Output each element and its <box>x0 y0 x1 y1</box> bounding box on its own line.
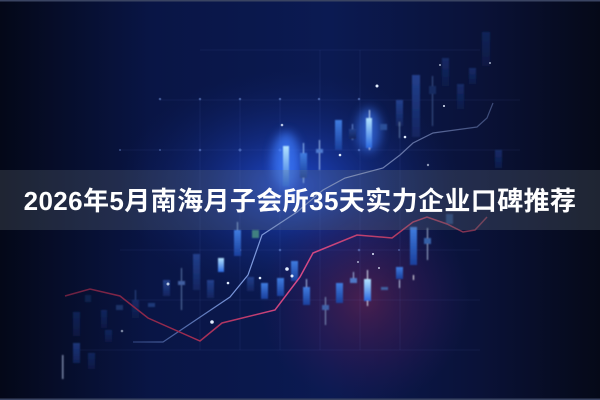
red trend line <box>65 217 487 341</box>
title band <box>0 170 600 230</box>
blue trend line <box>133 103 493 342</box>
candlesticks upper <box>272 32 502 188</box>
title: 2026年5月南海月子会所35天实力企业口碑推荐 <box>24 186 576 216</box>
sparkle dots <box>121 62 491 332</box>
candlesticks lower <box>62 214 453 379</box>
